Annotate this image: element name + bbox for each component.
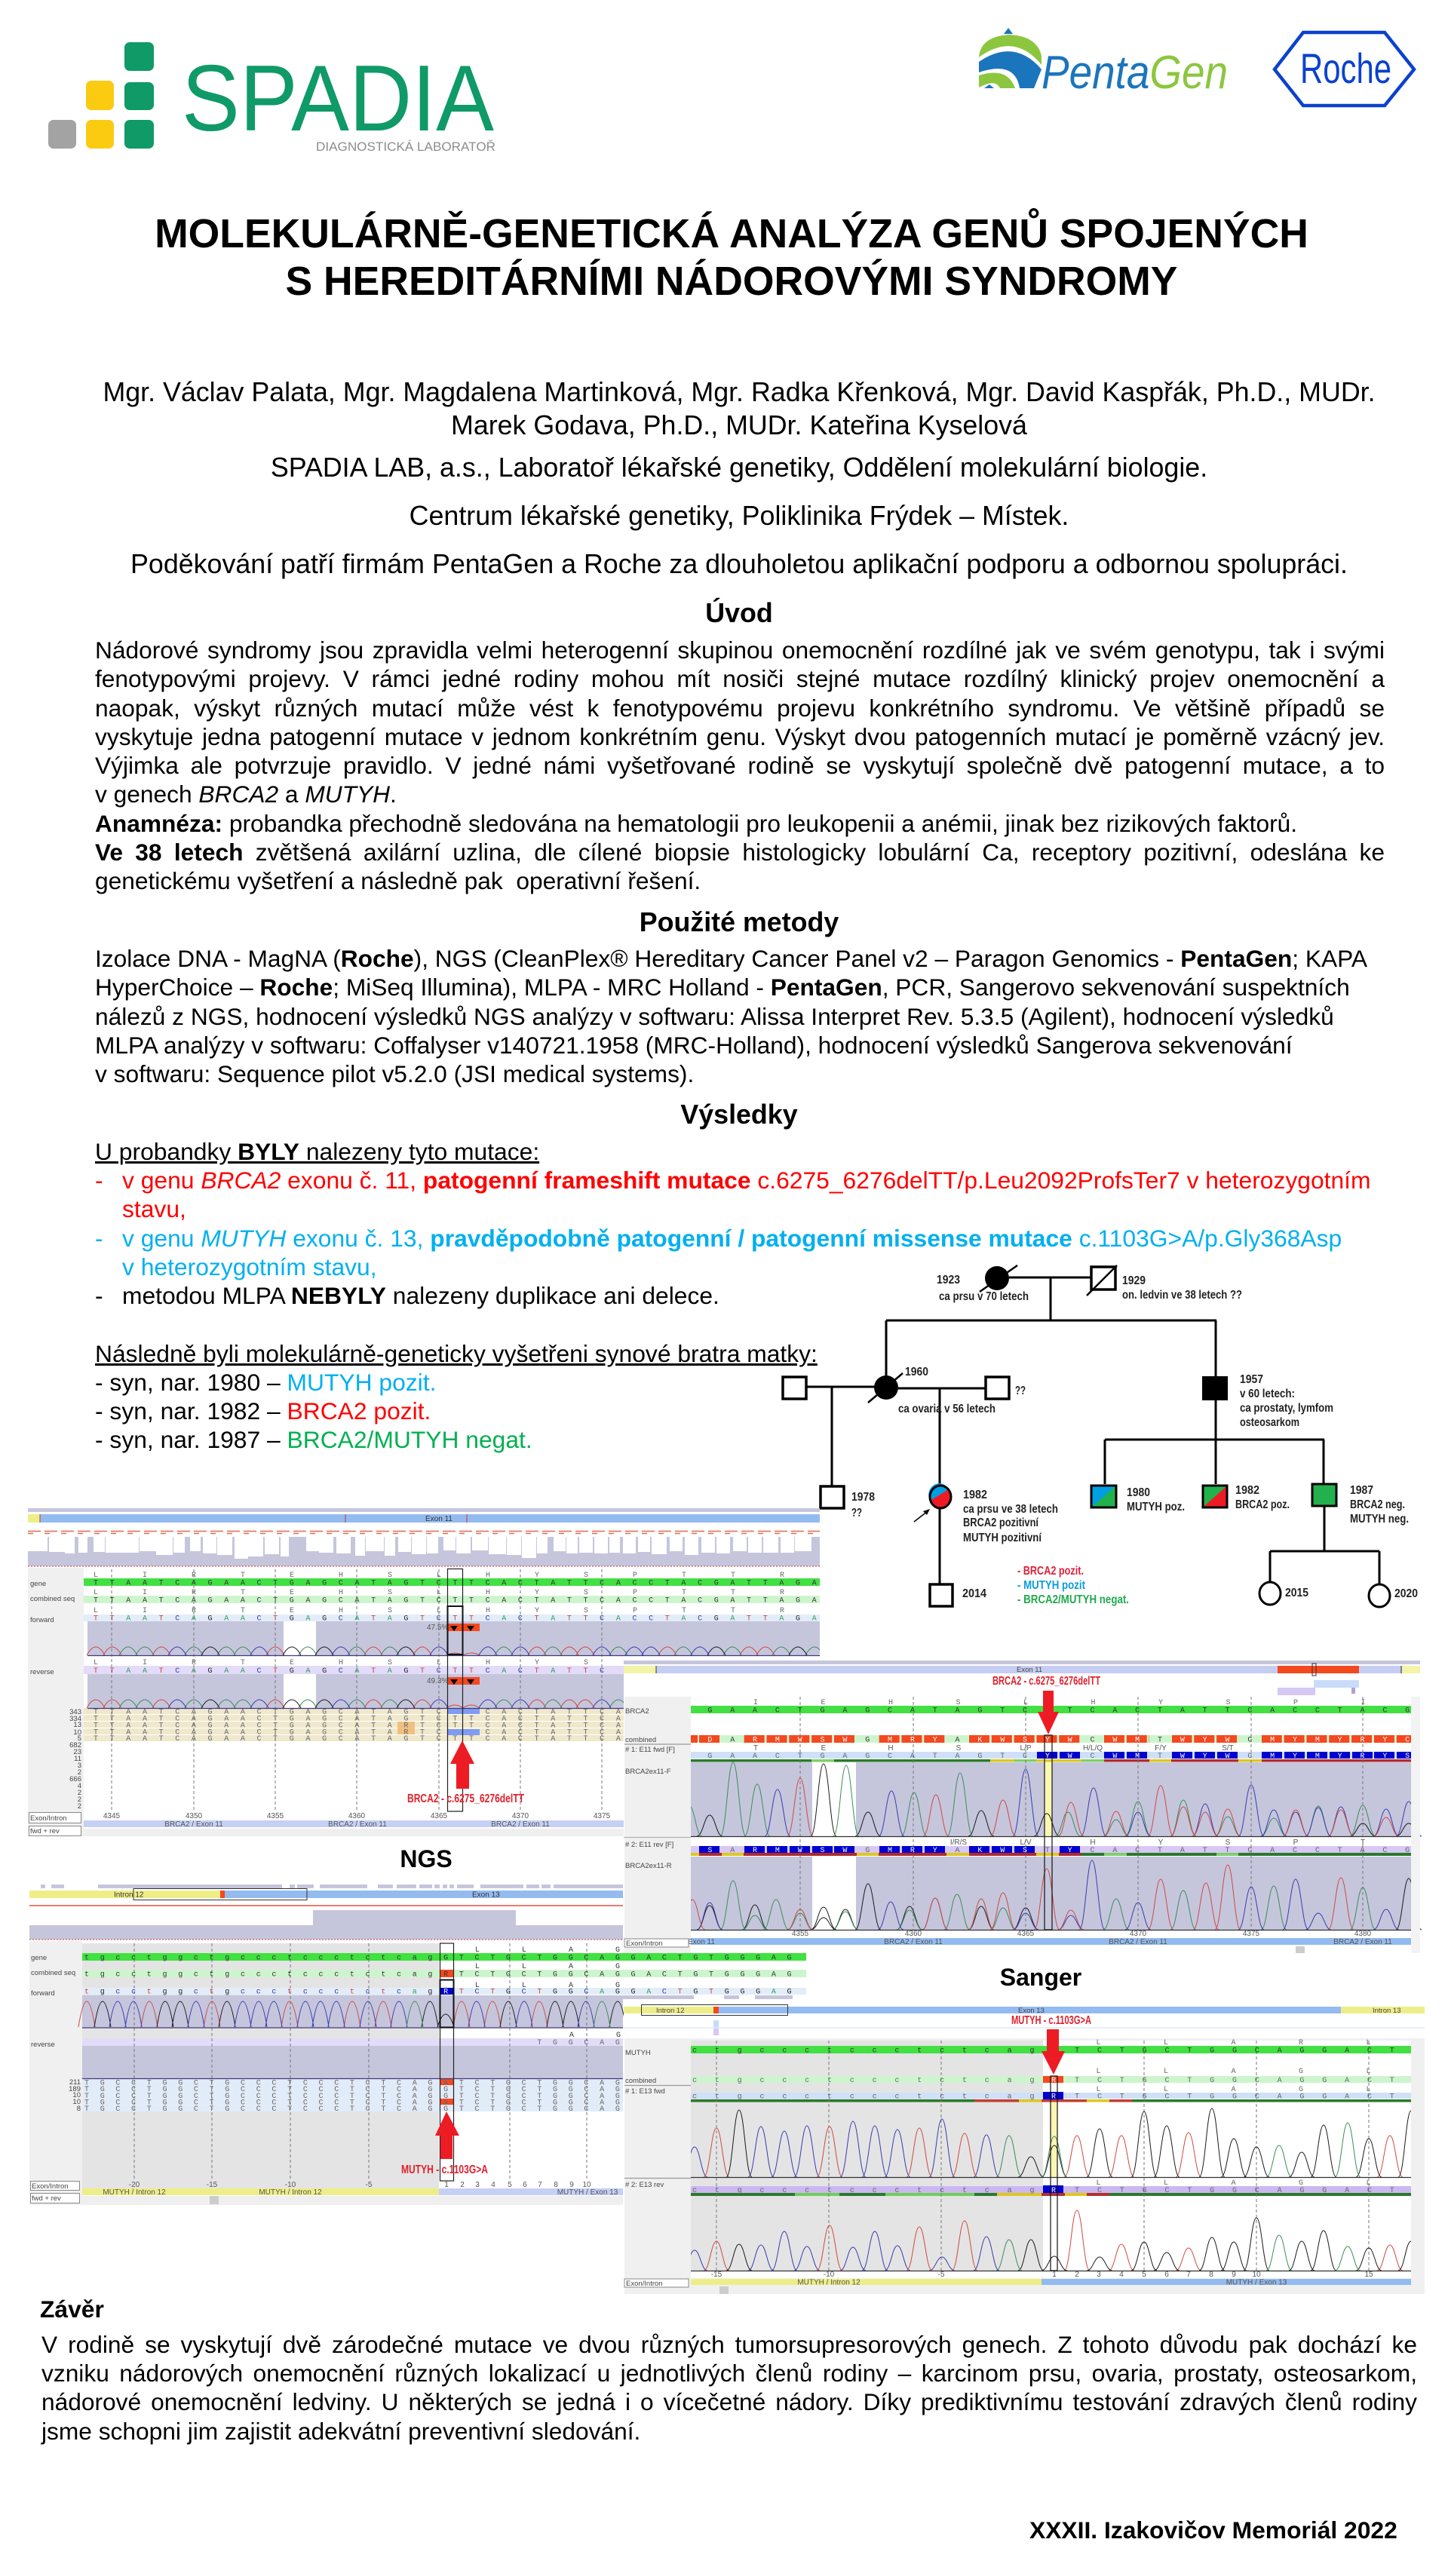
panel: Sanger MUTYH screenshot: 2	[1075, 2271, 1079, 2279]
panel: NGS MUTYH screenshot: TGGCAG	[84, 2039, 631, 2047]
panel: Sanger MUTYH screenshot: # 2: E13 rev	[625, 2181, 664, 2189]
panel: NGS MUTYH screenshot: -20	[129, 2181, 140, 2189]
panel: Sanger BRCA2 screenshot: Exon 11	[1017, 1666, 1042, 1674]
panel: Sanger MUTYH screenshot: 6	[1164, 2271, 1169, 2279]
panel: Sanger BRCA2 screenshot: I/R/S	[950, 1838, 967, 1847]
pedigree chart: 2015	[1285, 1587, 1308, 1599]
panel: Sanger BRCA2 screenshot: L/P	[1020, 1744, 1032, 1753]
panel: NGS MUTYH screenshot: 3	[475, 2181, 480, 2189]
panel: NGS BRCA2 screenshot: 4355	[267, 1812, 284, 1820]
panel: NGS BRCA2 screenshot: 2	[78, 1789, 81, 1797]
panel: Sanger MUTYH screenshot: 1	[1052, 2271, 1057, 2279]
panel: Sanger BRCA2 screenshot: S/T	[1222, 1744, 1234, 1753]
panel: Sanger MUTYH screenshot: Exon/Intron	[626, 2280, 663, 2288]
text block: proband mutations: v genu BRCA2 exonu č. 11, patogenní frameshift mutace c.6275_6276delTT/p.Leu2092ProfsTer7 v heterozygotním	[122, 1167, 1370, 1194]
panel: NGS BRCA2 screenshot: 10	[73, 1728, 81, 1737]
pedigree chart: 1987	[1350, 1484, 1373, 1497]
panel: Sanger MUTYH screenshot: -10	[824, 2271, 835, 2279]
panel: NGS BRCA2 screenshot: 343	[69, 1708, 81, 1716]
panel: Sanger MUTYH screenshot: # 1: E13 fwd	[625, 2087, 665, 2096]
panel: NGS MUTYH screenshot: Exon 13	[472, 1891, 500, 1899]
panel: Sanger MUTYH screenshot: -15	[711, 2271, 722, 2279]
panel: Sanger BRCA2 screenshot: S	[956, 1744, 962, 1753]
title	[155, 208, 1308, 303]
panel: Sanger BRCA2 screenshot: Exon 11	[688, 1938, 715, 1946]
panel: NGS BRCA2 screenshot: 13	[73, 1721, 81, 1729]
panel: NGS MUTYH screenshot: 1	[444, 2181, 449, 2189]
panel: Sanger BRCA2 screenshot: A G A T CACTATTCACCTACG	[707, 1847, 1423, 1855]
text block: methods: v softwaru: Sequence pilot v5.2.0 (JSI medical systems).	[95, 1060, 694, 1087]
panel: Sanger BRCA2 screenshot: BRCA2ex11-F	[625, 1768, 671, 1776]
pedigree chart: - BRCA2/MUTYH negat.	[1017, 1593, 1129, 1606]
authors: Marek Godava, Ph.D., MUDr. Kateřina Kyselová	[451, 410, 1027, 440]
panel: NGS MUTYH screenshot: 2	[460, 2181, 465, 2189]
panel: Sanger BRCA2 screenshot: S	[1226, 1838, 1231, 1847]
panel: Sanger MUTYH screenshot: ctgccctccctctcag TCTGCTGGCAGGACT	[692, 2077, 1413, 2085]
text block: introduction: genetickému vyšetření a následně pak operativní řešení.	[95, 867, 701, 894]
panel: NGS MUTYH screenshot: TGCCTGGCTGCCCTCCCTCTCAGATCTGCTGGCAG	[84, 2099, 631, 2107]
text block: introduction: Anamnéza: probandka přechodně sledována na hematologii pro leukopenii a anémii, jinak bez rizikových faktorů.	[95, 810, 1297, 837]
panel: NGS MUTYH screenshot: Intron 12	[114, 1891, 144, 1899]
panel: NGS MUTYH screenshot: 10	[72, 2091, 81, 2099]
panel: NGS MUTYH screenshot: MUTYH - c.1103G>A	[401, 2164, 488, 2176]
panel: NGS MUTYH screenshot: 211	[69, 2078, 81, 2087]
panel: NGS BRCA2 screenshot: AA A AA A A A A A A A A A A	[94, 1615, 820, 1623]
panel: Sanger BRCA2 screenshot: P	[1293, 1838, 1299, 1847]
panel: Sanger MUTYH screenshot: 10	[1252, 2271, 1261, 2279]
text block: proband mutations: U probandky BYLY nalezeny tyto mutace:	[95, 1138, 539, 1165]
text block: conclusion: V rodině se vyskytují dvě zárodečné mutace ve dvou různých tumorsupresorových genech. Z tohoto důvodu pak dochází ke	[41, 2331, 1417, 2358]
panel: NGS BRCA2 screenshot: 3	[78, 1762, 81, 1770]
panel: NGS MUTYH screenshot: reverse	[31, 2041, 55, 2049]
text block: sons tested: Následně byli molekulárně-geneticky vyšetřeni synové bratra matky:	[95, 1340, 818, 1367]
text block: conclusion: jsme schopni jim zajistit adekvátní preventivní sledování.	[41, 2418, 640, 2445]
panel: NGS BRCA2 screenshot: 4370	[512, 1812, 529, 1820]
panel: Sanger MUTYH screenshot: 3	[1097, 2271, 1101, 2279]
panel: Sanger MUTYH screenshot: R	[1051, 2187, 1056, 2195]
panel: NGS BRCA2 screenshot: 2	[78, 1802, 81, 1811]
panel: Sanger BRCA2 screenshot: BRCA2 / Exon 11	[1109, 1938, 1167, 1946]
panel: NGS MUTYH screenshot: 8	[77, 2105, 81, 2113]
panel: NGS BRCA2 screenshot: forward	[30, 1616, 54, 1624]
panel: NGS MUTYH screenshot: -10	[285, 2181, 296, 2189]
panel: NGS BRCA2 screenshot: Exon 11	[425, 1515, 452, 1523]
authors	[103, 377, 1376, 440]
panel: NGS BRCA2 screenshot: LIRTEHSLHYSPTTR	[94, 1589, 820, 1597]
panel: Sanger MUTYH screenshot: R	[1051, 2077, 1056, 2085]
pedigree chart: BRCA2 poz.	[1235, 1498, 1290, 1511]
pedigree chart: 1957	[1240, 1373, 1263, 1386]
panel: NGS BRCA2 screenshot: BRCA2 / Exon 11	[491, 1820, 550, 1829]
pedigree chart: BRCA2 neg.	[1350, 1498, 1405, 1511]
panel: Sanger BRCA2 screenshot: YW WM WYW MYMYRYS	[707, 1753, 1423, 1761]
text block: conclusion: vzniku nádorových onemocnění různých lokalizací u jednotlivých členů rodiny – karcinom prsu, ovaria, prostaty, osteosarkom,	[41, 2360, 1417, 2387]
panel: NGS MUTYH screenshot: Exon/Intron	[32, 2182, 69, 2191]
panel: NGS BRCA2 screenshot: TTAATCAGAACTGAGCATAGTC CACTATTCA	[94, 1709, 632, 1716]
panel: Sanger BRCA2 screenshot: combined	[625, 1736, 656, 1744]
panel: NGS BRCA2 screenshot: 682	[69, 1741, 81, 1750]
text block: introduction: Výjimka ale potvrzuje pravidlo. V jedné námi vyšetřované rodině se vyskytují společně dvě patogenní mutace, a to	[95, 752, 1385, 779]
logo: Roche	[1272, 30, 1416, 107]
panel: NGS MUTYH screenshot: LLAG	[475, 1946, 662, 1955]
affiliation: SPADIA LAB: SPADIA LAB, a.s., Laboratoř lékařské genetiky, Oddělení molekulární biologie.	[271, 452, 1207, 483]
panel: Sanger MUTYH screenshot: MUTYH / Intron 12	[797, 2279, 861, 2286]
panel: Sanger MUTYH screenshot: ctgccctccctctcag TCTGCTGGCAGGACT	[692, 2093, 1413, 2101]
panel: NGS BRCA2 screenshot: LIRTEHSLHYS	[94, 1659, 633, 1667]
panel: NGS BRCA2 screenshot: 4375	[594, 1812, 611, 1820]
label: NGS: NGS	[400, 1845, 452, 1872]
pedigree chart: 2020	[1394, 1587, 1418, 1600]
panel: NGS BRCA2 screenshot: BRCA2 - c.6275_6276delTT	[407, 1792, 524, 1805]
panel: NGS MUTYH screenshot: forward	[31, 1989, 55, 1998]
acknowledgement: Poděkování patří firmám PentaGen a Roche za dlouholetou aplikační podporu a odbornou spolupráci.	[130, 549, 1348, 579]
panel: NGS BRCA2 screenshot: reverse	[30, 1668, 54, 1676]
panel: NGS BRCA2 screenshot: TTAATCAGAACTGAGCATAGTCTTCACTATTCA	[94, 1735, 632, 1743]
panel: NGS MUTYH screenshot: -5	[366, 2181, 373, 2189]
panel: NGS MUTYH screenshot: 6	[523, 2181, 527, 2189]
panel: Sanger MUTYH screenshot: 9	[1232, 2271, 1236, 2279]
title: S HEREDITÁRNÍMI NÁDOROVÝMI SYNDROMY	[285, 259, 1178, 303]
panel: NGS MUTYH screenshot: 5	[508, 2181, 512, 2189]
panel: NGS BRCA2 screenshot: 666	[69, 1775, 81, 1783]
panel: NGS BRCA2 screenshot	[28, 1508, 820, 1836]
panel: NGS BRCA2 screenshot: 11	[74, 1755, 81, 1763]
panel: Sanger MUTYH screenshot: Exon 13	[1018, 2007, 1045, 2015]
heading: Závěr: Závěr	[40, 2295, 104, 2323]
panel: NGS MUTYH screenshot: -15	[207, 2181, 218, 2189]
panel: NGS BRCA2 screenshot: TT T T T T TT T TT T TT	[94, 1615, 779, 1623]
text block: proband mutations	[95, 1138, 1370, 1309]
panel: NGS BRCA2 screenshot: 4	[78, 1782, 81, 1790]
panel: Sanger BRCA2 screenshot: GAACTGAGCATAGTC TCACTATTCACCTACG	[707, 1707, 1423, 1715]
panel: NGS BRCA2 screenshot: LIRTEHSLHYSPTTR	[94, 1572, 820, 1580]
panel: NGS BRCA2 screenshot: combined seq	[30, 1595, 75, 1603]
pedigree chart: ca prsu ve 38 letech	[963, 1503, 1058, 1516]
panel: Sanger BRCA2 screenshot: 4365	[1017, 1930, 1035, 1938]
text block: introduction	[95, 636, 1385, 894]
text block: proband mutations: metodou MLPA NEBYLY nalezeny duplikace ani delece.	[122, 1282, 719, 1309]
panel: NGS MUTYH screenshot: TGCCTGGCTGCCCTCCCTCTCAGGTCTGCTGGCAG	[84, 2105, 631, 2114]
panel: NGS BRCA2 screenshot: 49.3%	[427, 1677, 448, 1685]
text block: methods	[95, 945, 1367, 1087]
panel: NGS MUTYH screenshot: R	[84, 1988, 459, 1997]
panel: NGS MUTYH screenshot: tgcctggctgccctccctctcagRTCTGCTGGCAGGACTGTGGGAG	[84, 1971, 802, 1979]
panel: NGS BRCA2 screenshot: 4345	[103, 1812, 121, 1820]
panel: NGS MUTYH screenshot: LLAG	[475, 1982, 662, 1990]
panel: Sanger BRCA2 screenshot: BRCA2 - c.6275_6276delTT	[992, 1675, 1100, 1688]
panel: NGS MUTYH screenshot: cc c ccc ccc c c C C C C	[84, 1988, 678, 1997]
panel: NGS BRCA2 screenshot: AA A AA A A A A A	[94, 1667, 567, 1676]
text block: introduction: v genech BRCA2 a MUTYH.	[95, 780, 397, 808]
pedigree chart: ca ovaria v 56 letech	[898, 1403, 996, 1415]
text block: conclusion	[41, 2331, 1417, 2445]
panel: Sanger BRCA2 screenshot: H/L/Q	[1083, 1744, 1103, 1753]
text block: introduction: fenotypovými projevy. V rámci jedné rodiny mohou mít nosiči stejné mutace rozdílný klinický projev onemocnění a	[95, 665, 1385, 692]
text block: methods: MLPA analýzy v softwaru: Coffalyser v140721.1958 (MRC-Holland), hodnocení výsledků Sangerova sekvenování	[95, 1032, 1293, 1059]
text block: methods: HyperChoice – Roche; MiSeq Illumina), MLPA - MRC Holland - PentaGen, PCR, Sangerovo sekvenování suspektních	[95, 974, 1350, 1001]
panel: Sanger BRCA2 screenshot	[624, 1661, 1423, 1953]
panel: Sanger MUTYH screenshot: MUTYH - c.1103G>A	[1011, 2014, 1091, 2027]
panel: NGS MUTYH screenshot: TGCCTGGCTGCCCTCCCTCTCAGGTCTGCTGGCAG	[84, 2086, 631, 2094]
panel: NGS BRCA2 screenshot: TT T T T T TT T TT	[94, 1667, 600, 1676]
footer: conference name: XXXII. Izakovičov Memoriál 2022	[1029, 2516, 1397, 2544]
pedigree chart: 1960	[905, 1366, 928, 1378]
text block: sons tested: - syn, nar. 1980 – MUTYH pozit.	[95, 1369, 436, 1396]
text block: proband mutations: -	[95, 1282, 103, 1309]
panel: NGS MUTYH screenshot: g gg g g G GG GG G GGG G	[84, 1988, 802, 1997]
panel: Sanger BRCA2 screenshot: F/Y	[1155, 1744, 1167, 1753]
pedigree chart: 1929	[1122, 1274, 1146, 1287]
pedigree chart: MUTYH pozitivní	[963, 1532, 1042, 1544]
panel: NGS MUTYH screenshot: LLAG	[475, 1963, 662, 1971]
panel: NGS MUTYH screenshot: tgcctggctgccctccctctcagGTCTGCTGGCAGGACTGTGGGAG	[84, 1955, 802, 1962]
panel: Sanger BRCA2 screenshot: BRCA2	[625, 1707, 649, 1716]
logo: SPADIA	[48, 42, 495, 154]
panel: NGS MUTYH screenshot: a A A A	[84, 1988, 787, 1997]
pedigree chart: BRCA2 pozitivní	[963, 1516, 1039, 1529]
pedigree chart: ca prsu v 70 letech	[939, 1290, 1029, 1303]
panel: NGS MUTYH screenshot: MUTYH / Intron 12	[103, 2188, 166, 2197]
panel: NGS BRCA2 screenshot: G G G G G G	[94, 1615, 812, 1623]
panel: Sanger BRCA2 screenshot: BRCA2ex11-R	[625, 1862, 672, 1870]
heading: Výsledky: Výsledky	[680, 1099, 798, 1130]
pedigree chart: MUTYH neg.	[1350, 1513, 1409, 1526]
panel: Sanger BRCA2 screenshot: 4375	[1243, 1930, 1260, 1938]
panel: Sanger BRCA2 screenshot: Exon/Intron	[626, 1940, 663, 1948]
pedigree chart: ??	[851, 1507, 862, 1520]
panel: NGS MUTYH screenshot: 4	[491, 2181, 495, 2189]
panel: Sanger BRCA2 screenshot: BRCA2 / Exon 11	[884, 1938, 943, 1946]
text block: sons tested	[95, 1340, 818, 1453]
panel: Sanger BRCA2 screenshot: E	[821, 1744, 827, 1753]
panel: NGS MUTYH screenshot: fwd + rev	[32, 2194, 61, 2203]
panel: Sanger MUTYH screenshot: Intron 13	[1373, 2007, 1401, 2015]
panel: NGS MUTYH screenshot: t t t t t t T T T T T	[84, 1988, 725, 1997]
pedigree chart: - MUTYH pozit	[1017, 1579, 1085, 1592]
panel: Sanger MUTYH screenshot: LLAGL	[1097, 2068, 1425, 2076]
label: Sanger: Sanger	[1000, 1964, 1081, 1991]
panel: NGS MUTYH screenshot: combined seq	[31, 1969, 75, 1977]
pedigree chart: 1980	[1127, 1486, 1150, 1499]
panel: NGS MUTYH screenshot: 10	[72, 2098, 81, 2106]
text block: proband mutations: stavu,	[122, 1195, 186, 1222]
heading: Použité metody: Použité metody	[640, 907, 839, 937]
logo: PentaGen	[979, 28, 1228, 94]
panel: NGS BRCA2 screenshot: TTAATCAGAACTGAGCATAGTCTTCACTATTCA	[94, 1715, 632, 1724]
panel: NGS MUTYH screenshot: MUTYH / Intron 12	[259, 2188, 322, 2197]
pedigree chart: ??	[1015, 1385, 1026, 1397]
panel: Sanger MUTYH screenshot: -5	[938, 2271, 945, 2279]
pedigree chart: osteosarkom	[1240, 1416, 1299, 1429]
panel: Sanger BRCA2 screenshot: # 1: E11 fwd [F]	[625, 1746, 675, 1754]
panel: NGS BRCA2 screenshot: TTAATCAGAACTGAGCATARTCTTCACTATTCA	[94, 1722, 632, 1730]
panel: Sanger MUTYH screenshot: LLAGL	[1097, 2179, 1425, 2188]
panel: NGS BRCA2 screenshot: 4360	[348, 1812, 366, 1820]
panel: NGS BRCA2 screenshot: LIRTEHSLHYSPTTR	[94, 1607, 820, 1615]
pedigree chart: on. ledvin ve 38 letech ??	[1122, 1289, 1242, 1302]
panel: Sanger BRCA2 screenshot: H	[1090, 1838, 1096, 1847]
affiliation: Centrum lékařské genetiky: Centrum lékařské genetiky, Poliklinika Frýdek – Místek.	[410, 501, 1069, 531]
panel: Sanger BRCA2 screenshot: Y	[1158, 1838, 1164, 1847]
pedigree chart	[781, 1265, 1418, 1608]
pedigree chart: 1978	[851, 1491, 875, 1504]
panel: NGS BRCA2 screenshot: 334	[69, 1715, 81, 1723]
pedigree chart: v 60 letech:	[1240, 1388, 1295, 1400]
panel: Sanger MUTYH screenshot: 15	[1364, 2271, 1373, 2279]
logo: SPADIA: DIAGNOSTICKÁ LABORATOŘ	[316, 140, 495, 154]
panel: NGS BRCA2 screenshot: BRCA2 / Exon 11	[328, 1820, 387, 1829]
panel: NGS BRCA2 screenshot: 4365	[431, 1812, 448, 1820]
text block: proband mutations: -	[95, 1225, 103, 1252]
panel: Sanger MUTYH screenshot: combined	[625, 2077, 656, 2085]
panel: Sanger BRCA2 screenshot: # 2: E11 rev [F]	[625, 1841, 673, 1849]
pedigree chart: - BRCA2 pozit.	[1017, 1565, 1084, 1578]
pedigree chart: 1923	[937, 1274, 960, 1286]
panel: Sanger BRCA2 screenshot: T	[753, 1744, 758, 1753]
panel: NGS BRCA2 screenshot: TTAATCAGAACTGAGCATARTC CACTATTCA	[94, 1728, 632, 1737]
panel: NGS MUTYH screenshot: MUTYH / Exon 13	[557, 2188, 618, 2197]
title: MOLEKULÁRNĚ-GENETICKÁ ANALÝZA GENŮ SPOJENÝCH	[155, 212, 1308, 256]
panel: Sanger BRCA2 screenshot: L/V	[1020, 1838, 1032, 1847]
panel: NGS BRCA2 screenshot: Exon/Intron	[30, 1814, 67, 1823]
panel: Sanger MUTYH screenshot: LLAGL	[1097, 2086, 1425, 2094]
panel: NGS MUTYH screenshot: 10	[582, 2181, 591, 2189]
panel: Sanger BRCA2 screenshot: 4360	[905, 1930, 922, 1938]
pedigree chart: ca prostaty, lymfom	[1240, 1402, 1333, 1415]
text block: methods: nálezů z NGS, hodnocení výsledků NGS analýzy v softwaru: Alissa Interpret Rev. 5.3.5 (Agilent), hodnocení výsledků	[95, 1003, 1334, 1030]
panel: NGS BRCA2 screenshot: C C C C C C C CC C	[94, 1615, 714, 1623]
panel: Sanger MUTYH screenshot: R	[1051, 2093, 1056, 2101]
text block: conclusion: nádorové onemocnění ledviny. U některých se jedná i o vícečetné nádory. Díky prediktivnímu testování zdravých členů rodiny	[41, 2388, 1417, 2415]
panel: NGS MUTYH screenshot: gene	[31, 1954, 47, 1962]
panel: NGS BRCA2 screenshot: G G G G	[94, 1667, 420, 1676]
panel: Sanger BRCA2 screenshot: D RMWSW MRY KWSYW WM WYW MYMYRYC	[707, 1736, 1423, 1745]
panel: NGS BRCA2 screenshot: 4350	[186, 1812, 203, 1820]
pedigree chart: 1982	[963, 1489, 987, 1501]
panel: Sanger MUTYH screenshot: 5	[1142, 2271, 1146, 2279]
panel: Sanger MUTYH screenshot	[624, 2004, 1425, 2294]
panel: NGS BRCA2 screenshot: fwd + rev	[30, 1827, 60, 1835]
panel: Sanger BRCA2 screenshot: 4355	[792, 1930, 809, 1938]
panel: NGS BRCA2 screenshot: gene	[30, 1580, 46, 1588]
text block: introduction: naopak, výskyt různých mutací může vést k fenotypovému projevu konkrétního syndromu. Ve většině případů se	[95, 695, 1385, 722]
panel: NGS BRCA2 screenshot: 47.5%	[427, 1624, 448, 1632]
panel: Sanger BRCA2 screenshot: A G A C T C	[707, 1736, 1270, 1745]
text block: proband mutations: -	[95, 1167, 103, 1194]
panel: NGS BRCA2 screenshot: 23	[73, 1748, 81, 1756]
panel: Sanger BRCA2 screenshot: BRCA2 / Exon 11	[1333, 1938, 1392, 1946]
panel: Sanger BRCA2 screenshot: IEHSLHYSPI	[753, 1699, 1423, 1707]
panel: NGS BRCA2 screenshot: 5	[78, 1734, 81, 1743]
panel: NGS BRCA2 screenshot: BRCA2 / Exon 11	[164, 1820, 223, 1829]
panel: Sanger BRCA2 screenshot: GAACTGAGCATAGTC C T C	[707, 1753, 1270, 1761]
panel: NGS BRCA2 screenshot: C C C C C C C	[94, 1667, 616, 1676]
panel: NGS MUTYH screenshot: AG	[569, 2032, 663, 2040]
panel: NGS BRCA2 screenshot: TTAATCAGAACTGAGCATAGTCTTCACTATTCACCTACGATTAGA	[94, 1579, 820, 1588]
panel: Sanger MUTYH screenshot: LLARL	[1097, 2039, 1425, 2047]
panel: Sanger BRCA2 screenshot: 4370	[1130, 1930, 1147, 1938]
text block: introduction: Nádorové syndromy jsou zpravidla velmi heterogenní skupinou onemocnění rozdílné jak ve svém genotypu, tak i svými	[95, 636, 1385, 664]
heading: Úvod: Úvod	[705, 598, 773, 628]
text block: proband mutations: v heterozygotním stavu,	[122, 1253, 377, 1280]
panel: NGS MUTYH screenshot: TGCCTGGCTGCCCTCCCTCTCAGATCTGCTGGCAG	[84, 2080, 631, 2087]
text block: introduction: vyskytuje jedna patogenní mutace v jednom konkrétním genu. Výskyt dvou patogenních mutací je poměrně vzácný jev.	[95, 723, 1385, 750]
panel: NGS MUTYH screenshot: 7	[538, 2181, 542, 2189]
pedigree chart: 2014	[962, 1587, 986, 1600]
panel: NGS BRCA2 screenshot: 2	[78, 1796, 81, 1804]
panel: NGS MUTYH screenshot: 8	[554, 2181, 558, 2189]
panel: NGS BRCA2 screenshot: 2	[78, 1768, 81, 1777]
panel: Sanger MUTYH screenshot: MUTYH	[625, 2049, 651, 2057]
panel: Sanger MUTYH screenshot: 8	[1209, 2271, 1213, 2279]
panel: Sanger BRCA2 screenshot: T	[1361, 1838, 1365, 1847]
text block: methods: Izolace DNA - MagNA (Roche), NGS (CleanPlex® Hereditary Cancer Panel v2 – Paragon Genomics - PentaGen; KAPA	[95, 945, 1367, 972]
pedigree chart: 1982	[1235, 1484, 1259, 1497]
pedigree chart: MUTYH poz.	[1127, 1501, 1185, 1513]
panel: Sanger MUTYH screenshot: ctgccctccctctcag TCTGCTGGCAGGACT	[692, 2187, 1413, 2195]
text block: sons tested: - syn, nar. 1982 – BRCA2 pozit.	[95, 1397, 431, 1424]
panel: NGS BRCA2 screenshot: TTAATCAGAACTGAGCATAGTCTTCACTATTCACCTACGATTAGA	[94, 1597, 820, 1605]
panel: NGS MUTYH screenshot: 189	[69, 2085, 81, 2093]
panel: Sanger MUTYH screenshot: MUTYH / Exon 13	[1226, 2279, 1287, 2286]
panel: Sanger BRCA2 screenshot: 4380	[1354, 1930, 1372, 1938]
panel: NGS MUTYH screenshot	[29, 1884, 806, 2205]
text block: proband mutations: v genu MUTYH exonu č. 13, pravděpodobně patogenní / patogenní missense mutace c.1103G>A/p.Gly368Asp	[122, 1225, 1342, 1252]
text block: introduction: Ve 38 letech zvětšená axilární uzlina, dle cílené biopsie histologicky lobulární Ca, receptory pozitivní, odeslána ke	[95, 839, 1385, 866]
panel: Sanger MUTYH screenshot: ctgccctccctctcag TCTGCTGGCAGGACT	[692, 2047, 1413, 2056]
panel: Sanger MUTYH screenshot: 7	[1186, 2271, 1191, 2279]
panel: Sanger BRCA2 screenshot: S RMWSW MRY KWS Y	[707, 1847, 1091, 1855]
authors: Mgr. Václav Palata, Mgr. Magdalena Martinková, Mgr. Radka Křenková, Mgr. David Kaspřák, Ph.D., MUDr.	[103, 377, 1376, 407]
panel: NGS MUTYH screenshot: 9	[569, 2181, 574, 2189]
panel: NGS MUTYH screenshot: TGCCTGGCTGCCCTCCCTCTCAGGTCTGCTGGCAG	[84, 2093, 631, 2101]
panel: Sanger MUTYH screenshot: Intron 12	[656, 2007, 685, 2015]
panel: Sanger BRCA2 screenshot: H	[888, 1744, 894, 1753]
panel: Sanger MUTYH screenshot: 4	[1119, 2271, 1124, 2279]
text block: sons tested: - syn, nar. 1987 – BRCA2/MUTYH negat.	[95, 1426, 532, 1453]
